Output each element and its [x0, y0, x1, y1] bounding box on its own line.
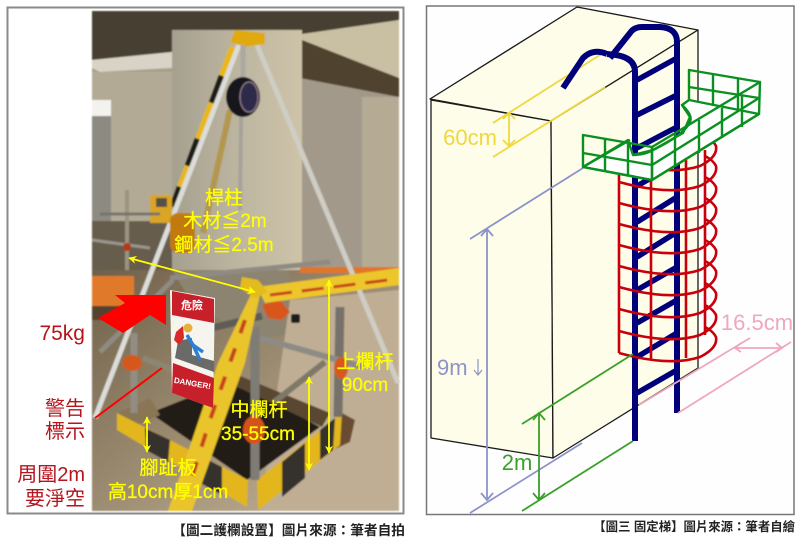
icon: red force arrow [98, 295, 166, 333]
caption: figure 2: 【圖二護欄設置】圖片來源：筆者自拍 [172, 522, 405, 538]
dimension: 2m [502, 354, 633, 511]
label: clearance [17, 464, 85, 510]
arrow: toe board height [146, 417, 148, 452]
label: mid rail: 35-55cm [221, 424, 295, 445]
dimension: 60cm: 60cm [443, 125, 497, 150]
label: top rail [336, 351, 394, 396]
ladder [563, 27, 677, 441]
warning sign [170, 290, 215, 408]
arrow: warning sign pointer [95, 368, 162, 418]
label: 75kg: 75kg [39, 322, 85, 345]
label: post spec [174, 187, 274, 256]
dimension: 16.5cm [639, 310, 793, 413]
label: post spec: 木材≦2m [183, 210, 267, 232]
arrow: post spacing [129, 258, 255, 292]
panel: guardrail photo frame [8, 8, 404, 514]
warning sign: 危險 [181, 298, 203, 312]
label: toe board [108, 457, 228, 503]
label: warning sign: 警告 [45, 397, 85, 420]
caption: figure 3: 【圖三 固定梯】圖片來源：筆者自繪 [593, 519, 796, 534]
label: mid rail [221, 399, 295, 445]
arrow: mid rail height [308, 377, 310, 470]
panel: fixed ladder diagram frame [426, 6, 794, 514]
rest platform [583, 70, 760, 180]
label: post spec: 鋼材≦2.5m [174, 234, 274, 256]
warning sign: DANGER! [173, 376, 212, 391]
dimension: 16.5cm: 16.5cm [721, 310, 793, 335]
dimension: 9m: 9m [437, 355, 468, 380]
label: top rail: 90cm [342, 375, 388, 396]
label: warning sign [45, 397, 85, 443]
label: warning sign: 標示 [45, 420, 85, 443]
dimension: 2m: 2m [502, 450, 532, 475]
photo: guardrail and tripod at opening [92, 11, 399, 511]
label: top rail: 上欄杆 [336, 351, 394, 373]
label: clearance: 要淨空 [25, 487, 85, 510]
label: clearance: 周圍2m [17, 464, 85, 486]
label: toe board: 腳趾板 [139, 457, 197, 479]
arrow: top rail height [328, 280, 330, 453]
label: toe board: 高10cm厚1cm [108, 481, 228, 503]
dimension: 60cm [443, 53, 605, 157]
safety cage [619, 136, 716, 361]
building block [430, 7, 698, 458]
label: mid rail: 中欄杆 [230, 399, 288, 421]
dimension: 9m [437, 168, 583, 513]
label: post spec: 桿柱 [205, 187, 243, 209]
